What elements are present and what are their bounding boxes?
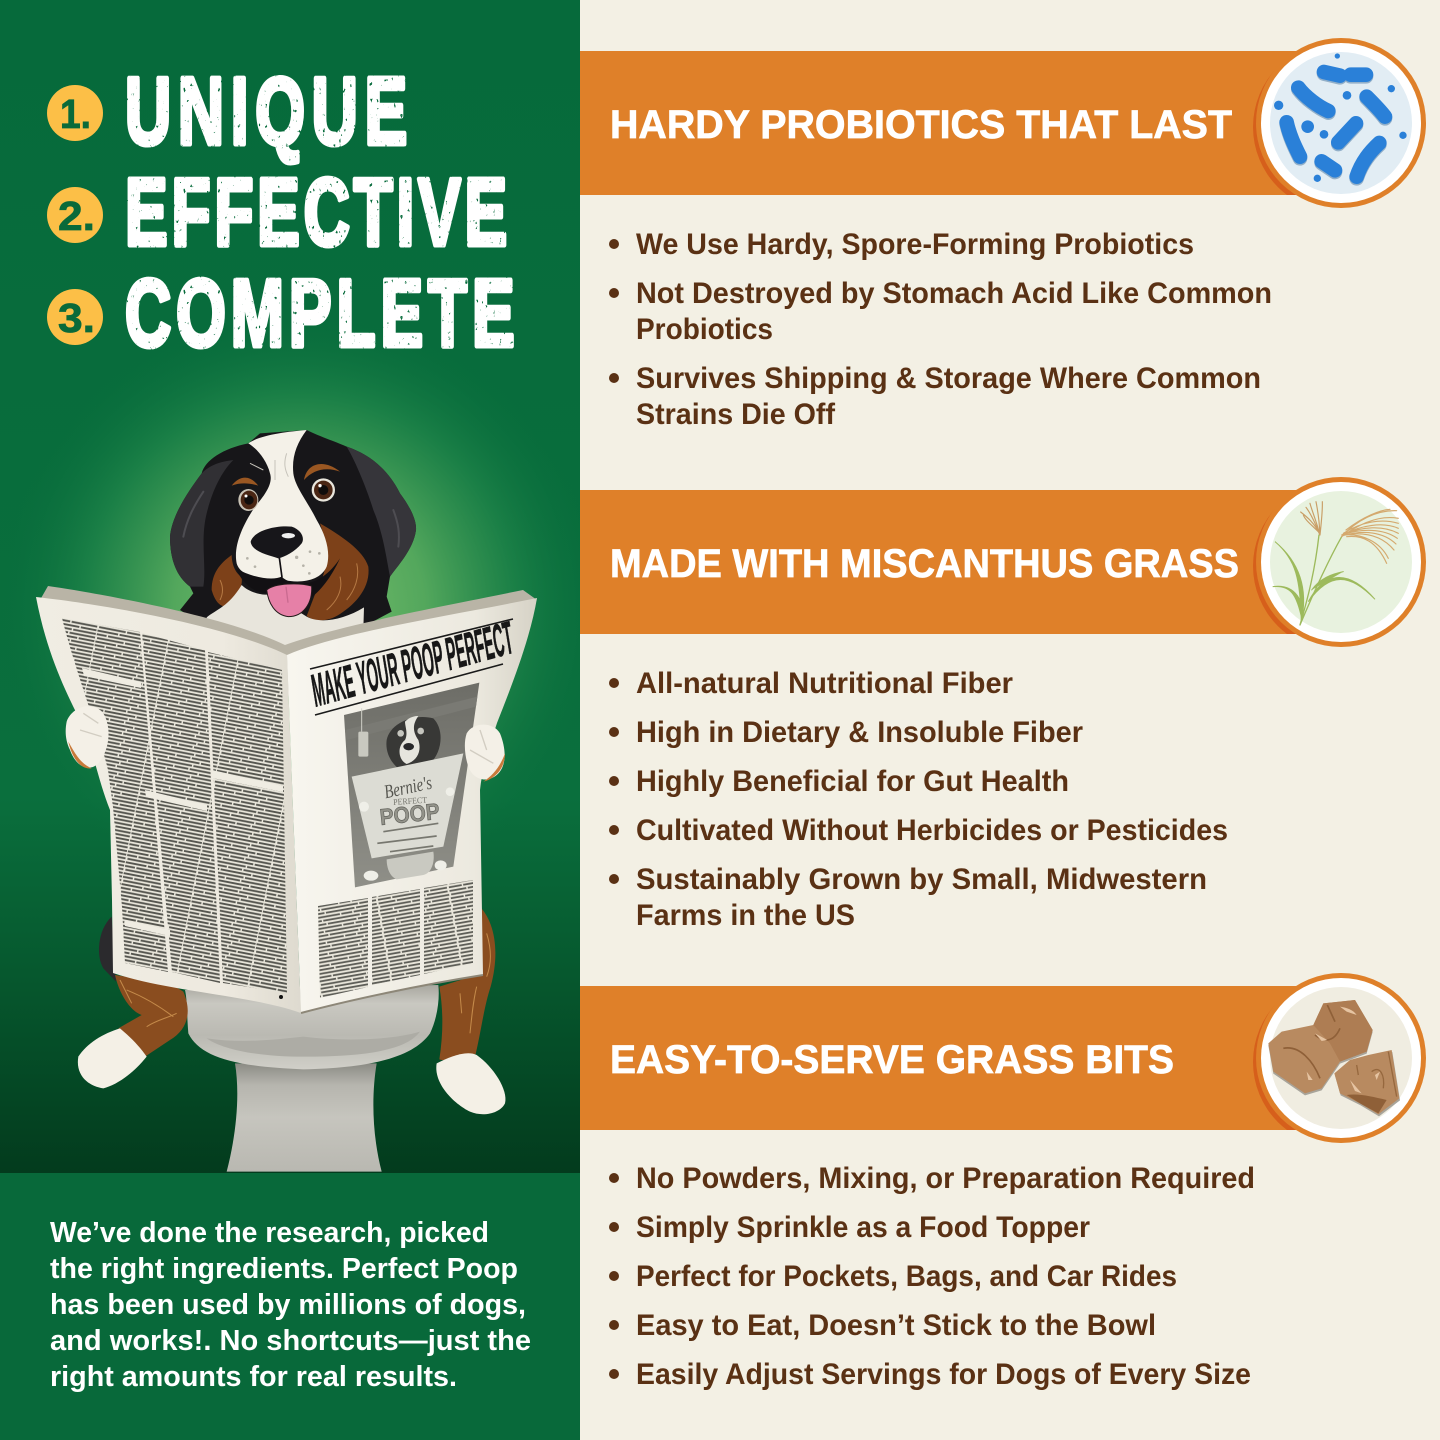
bullet list: Probiotics [636,313,773,346]
bullet list: Cultivated Without Herbicides or Pesticides [636,814,1228,847]
banner [580,490,1296,634]
tongue [267,584,312,617]
newspaper left page [36,597,301,1013]
newspaper photo of product bag: POOP [378,798,441,830]
toilet bowl [185,985,439,1069]
banner: EASY-TO-SERVE GRASS BITS [610,1038,1174,1082]
right leg [439,905,495,1060]
bullet list: Farms in the US [636,899,855,932]
icon: bacteria [1256,38,1426,208]
body copy: right amounts for real results. [50,1361,457,1393]
left foot [78,1028,147,1088]
bullet list [609,1162,1255,1391]
item 1: unique: UNIQUE [125,58,407,165]
left leg [115,975,188,1057]
bullet list: We Use Hardy, Spore-Forming Probiotics [636,228,1194,261]
white blaze and muzzle [236,430,328,583]
item 2: effective: EFFECTIVE [125,159,507,266]
dark body fur [99,917,116,982]
bullet list: All-natural Nutritional Fiber [636,667,1013,700]
bullet list [609,228,1272,431]
body copy: has been used by millions of dogs, [50,1289,526,1321]
bullet list: Strains Die Off [636,398,836,431]
bullet list: High in Dietary & Insoluble Fiber [636,716,1083,749]
left page text columns [62,618,287,993]
dog head [170,430,416,673]
newspaper photo of product bag: PERFECT [393,795,428,807]
toilet and dog legs [78,905,505,1172]
item 3: complete: 3. [58,295,95,341]
bullet list: No Powders, Mixing, or Preparation Required [636,1162,1255,1195]
whisker dots [246,550,321,575]
body copy: We’ve done the research, picked [50,1217,489,1249]
newspaper [36,586,537,1013]
icon: grass bits [1256,973,1426,1143]
panel: miscanthus grass [580,477,1426,932]
banner: HARDY PROBIOTICS THAT LAST [610,103,1232,147]
body copy: and works!. No shortcuts—just the [50,1325,531,1357]
white chest [207,585,364,673]
bullet list: Survives Shipping & Storage Where Common [636,362,1261,395]
right page text columns [318,880,473,998]
bullet list [609,667,1228,932]
newspaper photo of product bag [344,683,479,887]
numbered title list [47,58,515,367]
bullet list: Not Destroyed by Stomach Acid Like Common [636,277,1272,310]
banner: MADE WITH MISCANTHUS GRASS [610,542,1239,586]
dog paws holding paper [66,706,505,782]
item 3: complete: COMPLETE [125,260,515,367]
panel: grass bits [580,973,1426,1391]
panel: hardy probiotics [580,38,1426,431]
illustration: dog reading newspaper on toilet [36,430,537,1172]
bullet list: Highly Beneficial for Gut Health [636,765,1069,798]
brows [232,464,340,486]
banner [580,51,1296,195]
newspaper headline [308,611,516,717]
right paw [465,725,505,782]
item 1: unique: 1. [60,91,91,137]
mouth [236,558,340,598]
brown cheeks [212,555,242,607]
bullet list: Sustainably Grown by Small, Midwestern [636,863,1207,896]
bullet list: Easily Adjust Servings for Dogs of Every Size [636,1358,1251,1391]
body copy: the right ingredients. Perfect Poop [50,1253,518,1285]
nose [251,526,303,558]
banner [580,986,1296,1130]
newspaper right page [287,598,537,1013]
toilet base [227,1063,382,1172]
body copy [50,1217,531,1393]
eyes [312,478,335,502]
item 2: effective: 2. [58,193,95,239]
bullet list: Simply Sprinkle as a Food Topper [636,1211,1090,1244]
bullet list: Easy to Eat, Doesn’t Stick to the Bowl [636,1309,1156,1342]
panel: left green column [0,0,580,1440]
icon: grass [1256,477,1426,647]
newspaper photo of product bag: Bernie's [382,773,434,803]
bullet list: Perfect for Pockets, Bags, and Car Rides [636,1260,1177,1293]
left paw [66,706,109,768]
text: MAKE YOUR POOP PERFECT [308,611,516,717]
right foot [436,1053,505,1114]
